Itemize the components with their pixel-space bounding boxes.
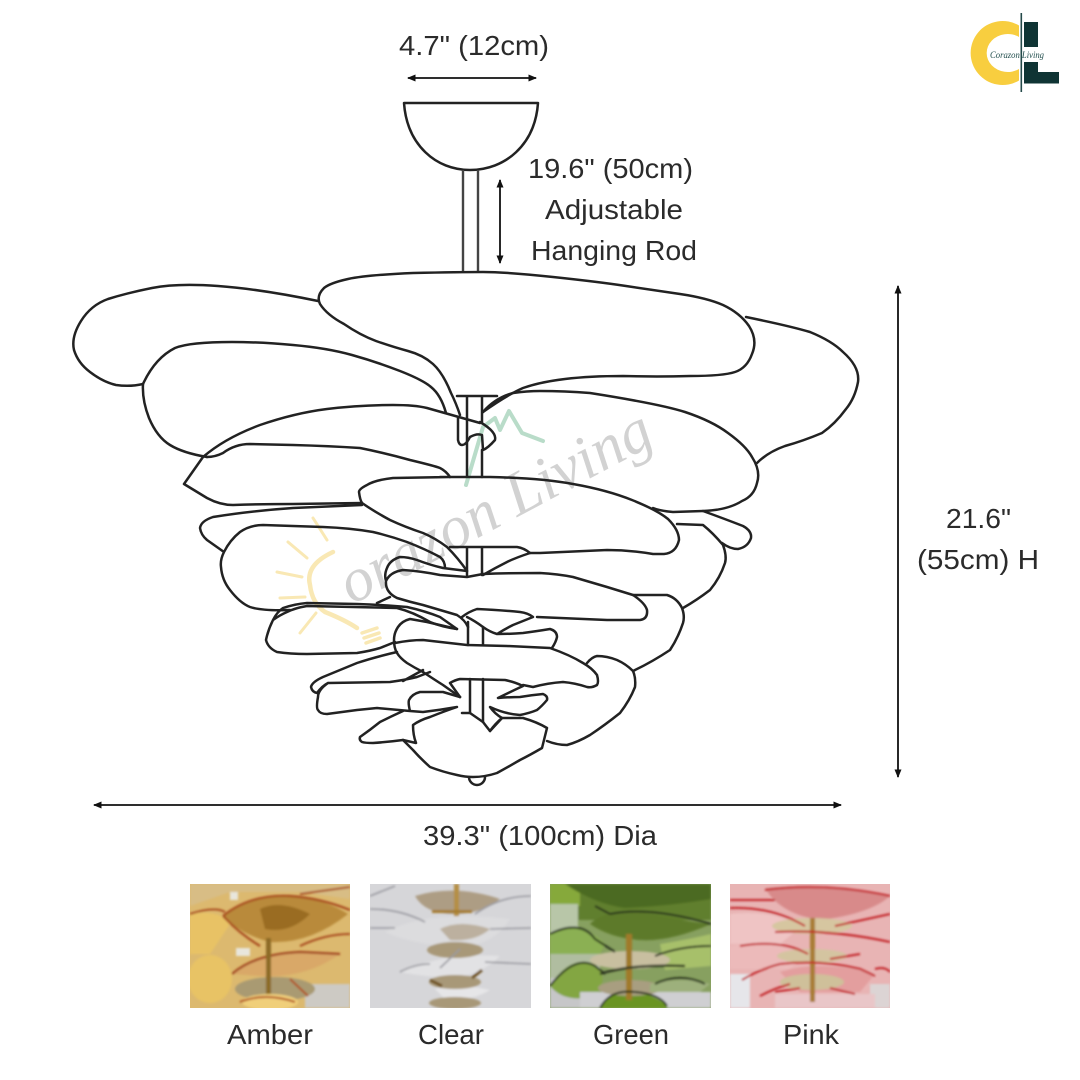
canopy arrow: [408, 77, 536, 79]
rod label: 19.6" (50cm): [528, 153, 693, 184]
canopy label: 4.7" (12cm): [399, 30, 549, 61]
bottom finial: [469, 777, 485, 785]
pink photo: [730, 884, 890, 1008]
green label: Green: [593, 1019, 669, 1050]
small center leaf: [462, 609, 557, 648]
clear label: Clear: [418, 1019, 484, 1050]
pink label: Pink: [783, 1019, 840, 1050]
lower right big leaf: [547, 656, 635, 745]
logo wordmark: Corazon Living: [990, 50, 1044, 60]
watermark bulb icon: [277, 518, 380, 643]
lower center leaf: [394, 619, 598, 697]
color swatch: pink: [730, 884, 890, 1050]
top leaf: [319, 272, 754, 415]
watermark lettering: orazon Living: [327, 395, 663, 617]
clear photo: [370, 884, 531, 1008]
lower left small leaves: [311, 652, 460, 743]
logo L: [1024, 22, 1059, 84]
center lower leaf: [377, 557, 647, 627]
chandelier line drawing: [73, 272, 858, 785]
hanging rod: [463, 170, 478, 272]
height arrow: [897, 286, 899, 777]
middle leaf left: [184, 405, 480, 505]
height label: 21.6": [946, 503, 1011, 534]
back leaf right: [746, 317, 858, 463]
watermark: Corazon Living: [277, 395, 663, 643]
rod length dimension: Hanging Rod: [531, 235, 697, 266]
color swatch: green: [550, 884, 711, 1050]
left lower leaves: [200, 505, 445, 610]
diameter arrow: [94, 804, 841, 806]
diameter label: 39.3" (100cm) Dia: [423, 820, 657, 851]
rod arrow: [499, 180, 501, 263]
lower left leaf: [266, 603, 457, 654]
lower collar leaves: [450, 679, 547, 731]
amber photo: [190, 884, 350, 1008]
bottom leaf: [403, 718, 547, 777]
right tab leaves: [677, 511, 751, 608]
center hook: [458, 418, 495, 450]
watermark house roof: [466, 411, 543, 485]
height dimension: [898, 286, 1039, 777]
rod length dimension: [500, 153, 697, 266]
upper back leaf left: [73, 285, 318, 386]
lower right leaf: [633, 595, 684, 671]
middle leaf right: [483, 391, 758, 512]
second leaf left: [143, 342, 446, 457]
center large leaf: [359, 477, 679, 575]
ceiling canopy: [404, 103, 538, 170]
rod length dimension: Adjustable: [545, 194, 683, 225]
color swatch: amber: [188, 884, 350, 1050]
amber label: Amber: [227, 1019, 313, 1050]
logo: Corazon Living: [971, 13, 1059, 92]
green photo: [550, 884, 711, 1008]
logo yellow C: [971, 21, 1019, 85]
rod segments: [450, 396, 530, 722]
height dimension: (55cm) H: [917, 544, 1039, 575]
color swatch: clear: [370, 884, 531, 1050]
logo divider: [1020, 13, 1022, 92]
